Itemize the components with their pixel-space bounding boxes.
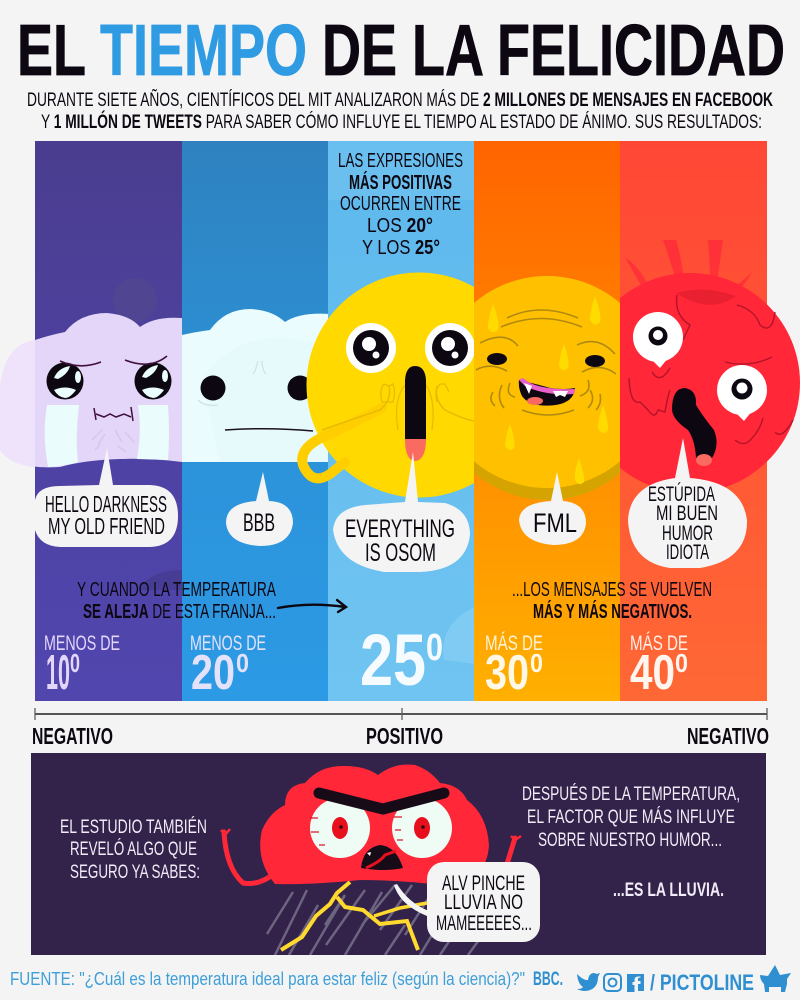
temperature labels: 20 xyxy=(191,646,235,700)
center note: best range xyxy=(338,150,463,259)
neutral eyes xyxy=(200,376,312,400)
grimace mouth xyxy=(519,378,575,406)
center note: best range: MÁS POSITIVAS xyxy=(349,171,452,194)
temperature labels: MÁS DE xyxy=(485,632,543,655)
source line: FUENTE: "¿Cuál es la temperatura ideal para estar feliz (según la ciencia)?" xyxy=(10,969,525,989)
intro text xyxy=(27,89,773,133)
twisted mouth xyxy=(672,388,717,466)
temperature columns xyxy=(35,141,767,701)
wordmark: / PICTOLINE xyxy=(650,970,754,995)
panel text: left xyxy=(60,817,207,883)
temperature labels: 0 xyxy=(426,627,443,669)
panel text: right: SOBRE NUESTRO HUMOR... xyxy=(538,830,722,851)
steam rays xyxy=(625,240,752,286)
temperature labels: MÁS DE xyxy=(630,632,688,655)
center note: best range: Y LOS 25° xyxy=(362,237,440,259)
yellow happy sun xyxy=(297,272,474,498)
flat mouth xyxy=(225,429,313,431)
temperature labels: 0 xyxy=(675,648,688,678)
lightning xyxy=(281,882,427,950)
panel text: left: SEGURO YA SABES: xyxy=(70,862,200,883)
speech bubble: everything is osom: EVERYTHING xyxy=(345,515,455,543)
speech bubble: estupida: IDIOTA xyxy=(666,541,709,564)
center note: best range: OCURREN ENTRE xyxy=(340,193,461,215)
wobbly mouth xyxy=(94,407,133,421)
rain streaks xyxy=(267,880,490,955)
center note: best range: LAS EXPRESIONES xyxy=(338,150,463,172)
mood scale: NEGATIVO xyxy=(32,723,113,749)
sad eyes xyxy=(46,356,172,400)
panel text: right xyxy=(522,784,740,901)
temperature labels: 0 xyxy=(236,648,249,678)
orange tired sun xyxy=(474,276,620,500)
mood scale xyxy=(32,708,769,749)
angry brow xyxy=(319,793,444,809)
speech bubble: BBB xyxy=(226,472,293,546)
speech bubble: hello darkness: HELLO DARKNESS xyxy=(45,491,167,517)
speech bubble: BBB: BBB xyxy=(243,509,275,537)
note: moving away from range: Y CUANDO LA TEMPERATURA xyxy=(77,579,276,601)
bulging eyes xyxy=(633,312,767,421)
note: more negative messages: MÁS Y MÁS NEGATIVOS. xyxy=(533,600,692,623)
temperature labels: 40 xyxy=(630,646,675,700)
purple sad cloud xyxy=(0,313,182,467)
panel text: left: EL ESTUDIO TAMBIÉN xyxy=(60,817,207,838)
icon: bull xyxy=(760,965,791,992)
temperature labels: 30 xyxy=(485,646,529,700)
icon: instagram xyxy=(604,974,621,991)
speech bubble: FML xyxy=(519,472,586,545)
note: moving away from range: SE ALEJA DE ESTA FRANJA... xyxy=(83,601,276,623)
speech bubble: everything is osom: IS OSOM xyxy=(365,539,436,567)
panel text: right: ...ES LA LLUVIA. xyxy=(613,880,724,901)
note: more negative messages xyxy=(512,579,712,623)
speech bubble: hello darkness: MY OLD FRIEND xyxy=(48,513,165,539)
angry cloud xyxy=(221,764,521,886)
furious eyes xyxy=(310,798,452,858)
long open mouth xyxy=(405,366,426,461)
note: moving away from range xyxy=(77,579,276,623)
arrow xyxy=(278,600,346,612)
red furious face xyxy=(620,240,800,488)
speech bubble: estupida: ESTÚPIDA xyxy=(648,483,715,506)
panel text: left: REVELÓ ALGO QUE xyxy=(70,838,197,860)
speech bubble: rain complaint: ALV PINCHE xyxy=(442,872,525,895)
icon: twitter xyxy=(577,973,600,991)
speech bubble: estupida: HUMOR xyxy=(662,522,713,545)
icon: facebook xyxy=(627,974,644,992)
brand: social icons and pictoline xyxy=(577,965,791,995)
center note: best range: LOS 20° xyxy=(367,215,433,237)
speech bubble: hello darkness xyxy=(35,448,178,547)
sweat drops xyxy=(488,296,608,484)
source line: BBC. xyxy=(533,969,563,990)
speech bubble: rain complaint: MAMEEEEES... xyxy=(436,912,532,935)
temperature labels: 25 xyxy=(360,620,426,701)
mood scale: POSITIVO xyxy=(366,723,443,749)
panel: rain xyxy=(31,753,766,955)
temperature labels: 10 xyxy=(46,646,70,700)
speech bubble: estupida xyxy=(628,438,747,568)
speech bubble: rain complaint xyxy=(394,862,540,942)
speech bubble: rain complaint: LLUVIA NO xyxy=(444,891,523,914)
speech bubble: FML: FML xyxy=(533,508,577,538)
temperature labels xyxy=(44,620,688,701)
speech bubble: everything is osom xyxy=(333,452,470,572)
wrinkled eyes and brow xyxy=(476,310,616,415)
arm loop xyxy=(302,408,382,478)
speech bubble: estupida: MI BUEN xyxy=(656,502,718,525)
temperature labels: MENOS DE xyxy=(44,632,120,655)
temperature labels: 0 xyxy=(70,648,80,678)
temperature labels: MENOS DE xyxy=(190,632,266,655)
cracks xyxy=(629,295,793,444)
white neutral cloud xyxy=(182,309,330,462)
temperature labels: 0 xyxy=(530,648,543,678)
shouting mouth xyxy=(361,845,403,870)
tears xyxy=(45,405,169,467)
wide eyes xyxy=(346,323,475,373)
